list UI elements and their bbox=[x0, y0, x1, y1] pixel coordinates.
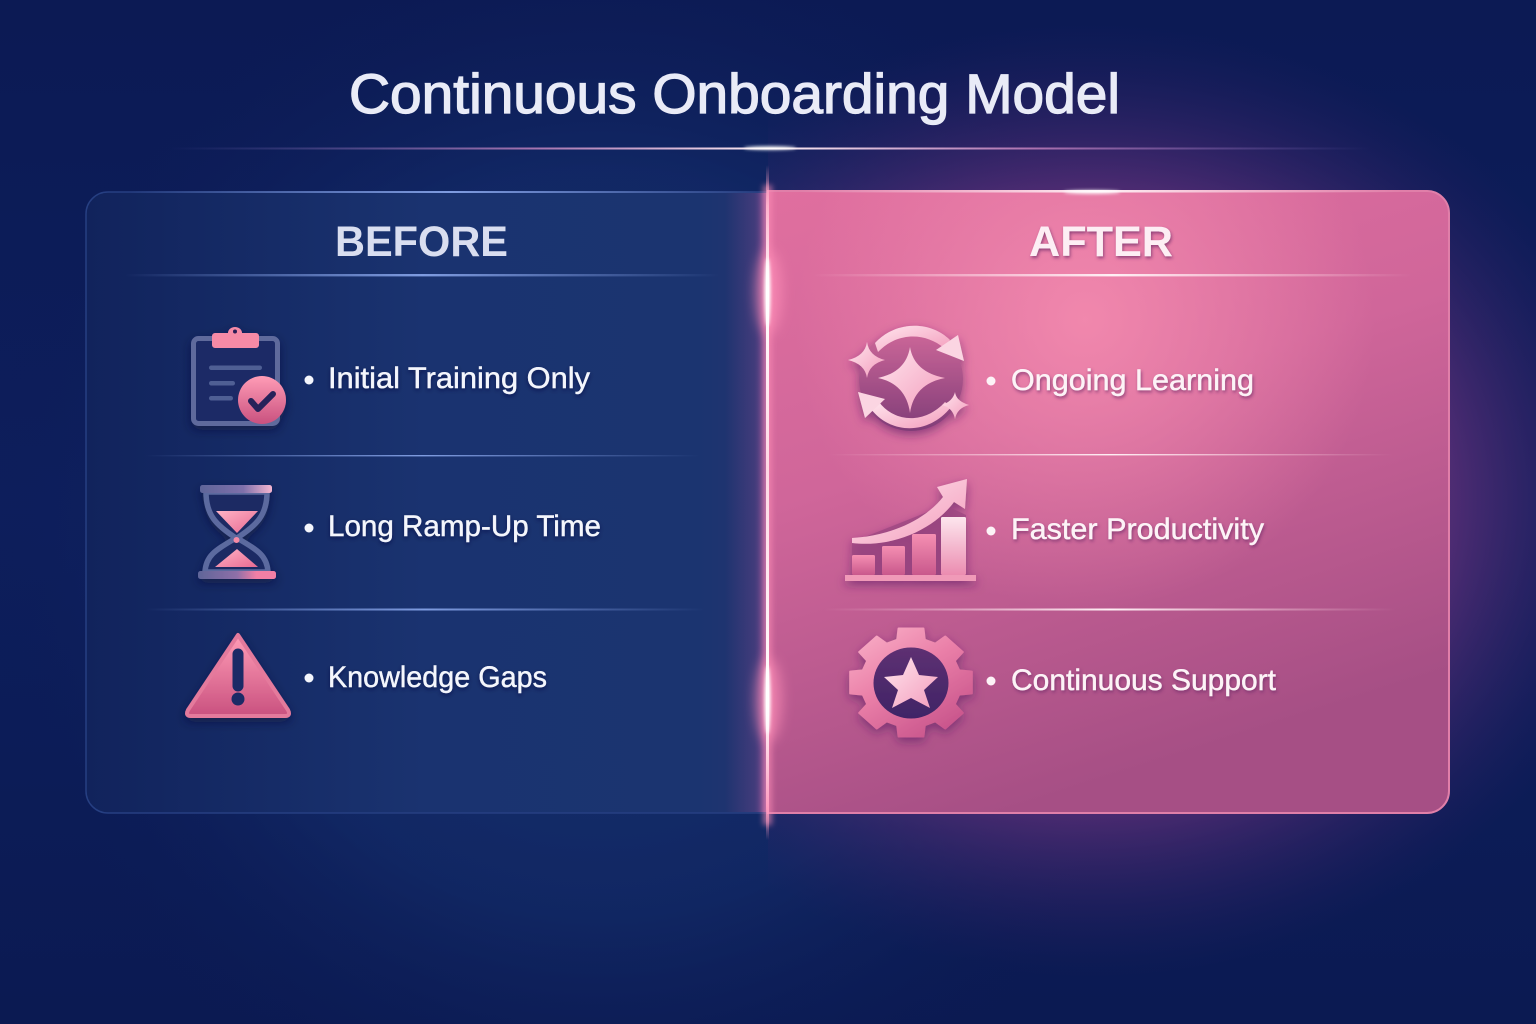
panel top highlight bbox=[130, 191, 770, 193]
label: long ramp-up time: Long Ramp-Up Time bbox=[328, 510, 601, 543]
row: continuous support bbox=[850, 628, 1277, 737]
row: long ramp-up time bbox=[198, 485, 601, 579]
icon: growth chart bbox=[845, 479, 976, 581]
label: initial training only: Initial Training Only bbox=[328, 362, 590, 395]
row: initial training only bbox=[194, 327, 590, 424]
label: continuous support: Continuous Support bbox=[1011, 664, 1277, 697]
icon: hourglass bbox=[198, 485, 276, 579]
divider bbox=[824, 608, 1396, 610]
icon: gear with star bbox=[850, 628, 972, 737]
center divider beam bbox=[725, 165, 782, 840]
heading rule: after bbox=[812, 274, 1412, 276]
bullet bbox=[304, 674, 314, 682]
heading rule: before bbox=[125, 274, 720, 276]
panel top highlight bbox=[800, 190, 1400, 194]
bullet bbox=[986, 526, 996, 536]
label: faster productivity: Faster Productivity bbox=[1011, 513, 1264, 546]
bullet bbox=[304, 376, 314, 384]
bullet bbox=[986, 676, 996, 686]
icon: cycle with sparkles bbox=[848, 326, 969, 431]
title underline glow bbox=[170, 146, 1370, 150]
heading: before: BEFORE bbox=[335, 218, 508, 266]
label: ongoing learning: Ongoing Learning bbox=[1011, 364, 1254, 397]
icon: clipboard with check bbox=[194, 327, 286, 424]
label: knowledge gaps: Knowledge Gaps bbox=[328, 661, 547, 694]
divider bbox=[145, 455, 700, 456]
bullet bbox=[304, 524, 314, 532]
divider bbox=[145, 608, 705, 610]
bullet bbox=[986, 376, 996, 386]
heading: after: AFTER bbox=[1029, 218, 1173, 266]
panel: before bbox=[86, 191, 770, 813]
title: Continuous Onboarding Model bbox=[349, 62, 1120, 125]
row: ongoing learning bbox=[848, 326, 1254, 431]
row: faster productivity bbox=[845, 479, 1264, 581]
icon: warning triangle bbox=[187, 635, 289, 716]
divider bbox=[828, 454, 1393, 455]
row: knowledge gaps bbox=[187, 635, 547, 716]
panel: after bbox=[768, 190, 1449, 813]
